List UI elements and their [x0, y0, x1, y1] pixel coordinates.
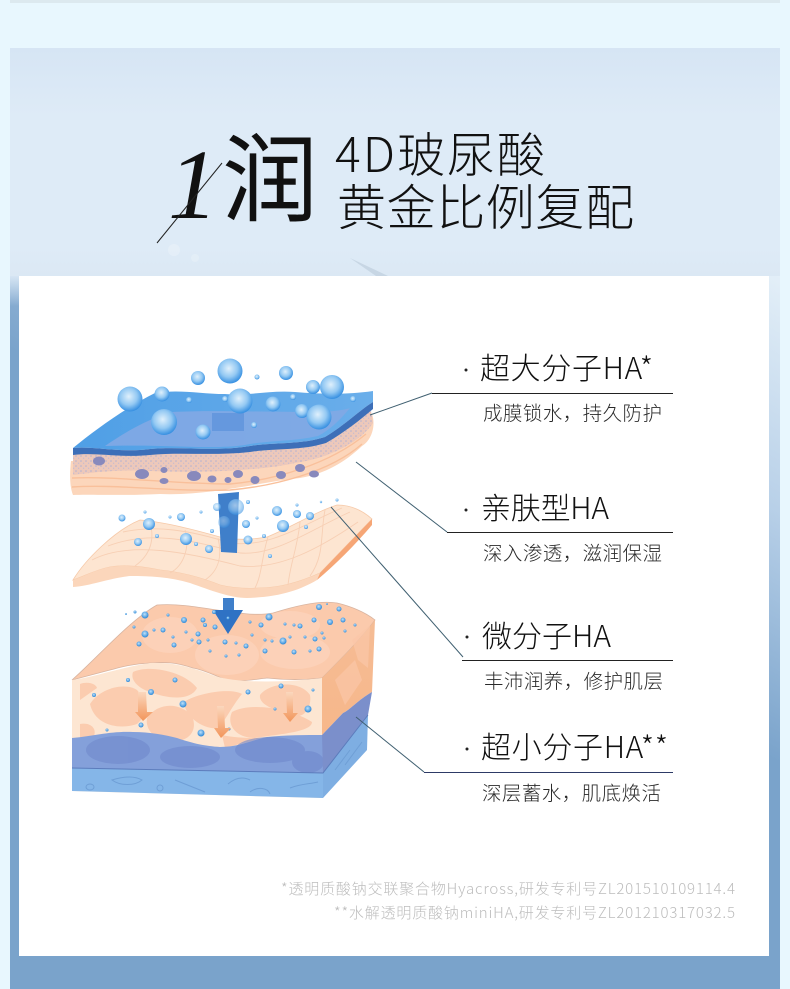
callout description: 深入渗透，滋润保湿: [483, 537, 662, 566]
divider line: [447, 532, 673, 533]
title character: 润: [222, 103, 318, 242]
divider line: [432, 393, 673, 394]
title number 1: 1: [168, 129, 218, 240]
callout description: 深层蓄水，肌底焕活: [482, 777, 661, 806]
bullet: [464, 368, 468, 372]
surface droplets: [92, 603, 356, 736]
top strip: [10, 0, 780, 3]
title line 1: 4D玻尿酸: [335, 116, 545, 186]
hyaluronic acid bubbles: [118, 358, 356, 440]
bottom skin block: [72, 602, 375, 798]
skin layers illustration: [70, 358, 375, 798]
white content panel: [19, 276, 769, 956]
divider line: [424, 772, 673, 773]
bullet: [466, 748, 468, 750]
callout description: 成膜锁水，持久防护: [483, 397, 662, 426]
top skin layer: [70, 391, 374, 495]
bullet: [464, 508, 468, 512]
footnote 2: **水解透明质酸钠miniHA,研发专利号ZL201210317032.5: [334, 902, 735, 923]
title: [157, 103, 634, 243]
callout: skin-friendly HA: [447, 484, 673, 566]
callout: ultra small molecule HA: [424, 723, 673, 806]
callout heading: 微分子HA: [482, 612, 611, 656]
middle skin layer: [73, 505, 372, 598]
footnote 1: *透明质酸钠交联聚合物Hyacross,研发专利号ZL201510109114.4: [281, 878, 735, 899]
callout: micro molecule HA: [462, 612, 673, 694]
arrow: lower head: [213, 598, 243, 634]
callout description: 丰沛润养，修护肌层: [484, 665, 663, 694]
title line 2: 黄金比例复配: [337, 169, 634, 240]
footnotes: [281, 878, 735, 923]
arrow: upper shaft: [218, 492, 239, 553]
divider line: [462, 660, 673, 661]
middle bubbles: [118, 498, 338, 558]
leader lines: [331, 393, 463, 772]
callout heading: 超大分子HA*: [480, 344, 653, 388]
callout heading: 亲肤型HA: [481, 484, 609, 528]
callout heading: 超小分子HA**: [481, 723, 668, 767]
orange down arrows: [135, 692, 298, 738]
slash: [157, 163, 222, 243]
bullet: [466, 636, 468, 638]
callout: ultra large molecule HA: [432, 344, 673, 426]
